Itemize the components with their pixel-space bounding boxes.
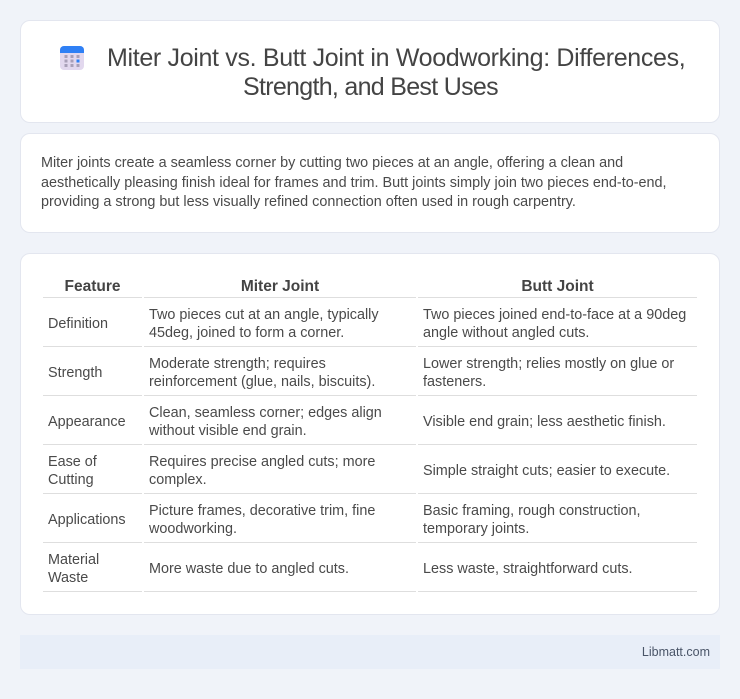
row: definition: Two pieces cut at an angle, typically [149, 307, 379, 323]
row: appearance [48, 405, 666, 439]
row: ease of cutting: complex. [149, 472, 207, 488]
row: strength [48, 356, 674, 390]
row: ease of cutting [48, 454, 670, 488]
table header: Miter Joint [241, 278, 319, 295]
intro paragraph: providing a strong but less visually refined connection often used in rough carpentry. [41, 194, 576, 210]
title [107, 44, 685, 101]
footer [20, 635, 720, 669]
title: Strength, and Best Uses [243, 73, 498, 101]
icon: calendar [60, 46, 84, 70]
footer credit: Libmatt.com [642, 645, 710, 659]
intro paragraph: Miter joints create a seamless corner by cutting two pieces at an angle, offering a clean and [41, 155, 623, 171]
table header: Feature [64, 278, 120, 295]
panel: title header [20, 20, 720, 123]
panel: comparison table [20, 253, 720, 615]
row: material waste: Less waste, straightforward cuts. [423, 561, 633, 577]
row: applications: temporary joints. [423, 521, 529, 537]
row: ease of cutting: Cutting [48, 472, 94, 488]
panel: intro text [20, 133, 720, 233]
row: definition [48, 307, 686, 341]
row: applications: Basic framing, rough construction, [423, 503, 641, 519]
row: definition: 45deg, joined to form a corner. [149, 325, 344, 341]
row: applications: Applications [48, 512, 126, 528]
table header: Butt Joint [521, 278, 594, 295]
row: ease of cutting: Ease of [48, 454, 97, 470]
row: applications: Picture frames, decorative trim, fine [149, 503, 375, 519]
row: ease of cutting: Simple straight cuts; easier to execute. [423, 463, 670, 479]
title: Miter Joint vs. Butt Joint in Woodworking: Differences, [107, 44, 685, 72]
row: material waste [48, 552, 633, 586]
row: material waste: Waste [48, 570, 88, 586]
row: material waste: Material [48, 552, 99, 568]
row: strength: reinforcement (glue, nails, biscuits). [149, 374, 375, 390]
row: definition: Definition [48, 316, 108, 332]
row: definition: Two pieces joined end-to-face at a 90deg [423, 307, 686, 323]
row: appearance: Appearance [48, 414, 126, 430]
row: definition: angle without angled cuts. [423, 325, 589, 341]
row: applications [48, 503, 641, 537]
intro paragraph: aesthetically pleasing finish ideal for frames and trim. Butt joints simply join two pieces end-to-end, [41, 174, 666, 190]
row: strength: Strength [48, 365, 102, 381]
row: ease of cutting: Requires precise angled cuts; more [149, 454, 375, 470]
row: appearance: Clean, seamless corner; edges align [149, 405, 382, 421]
row: applications: woodworking. [149, 521, 237, 537]
row: appearance: Visible end grain; less aesthetic finish. [423, 414, 666, 430]
row: appearance: without visible end grain. [149, 423, 307, 439]
table header [64, 278, 594, 295]
row: strength: fasteners. [423, 374, 486, 390]
row: strength: Moderate strength; requires [149, 356, 326, 372]
intro paragraph [41, 155, 666, 210]
row: material waste: More waste due to angled cuts. [149, 561, 349, 577]
row: strength: Lower strength; relies mostly on glue or [423, 356, 674, 372]
